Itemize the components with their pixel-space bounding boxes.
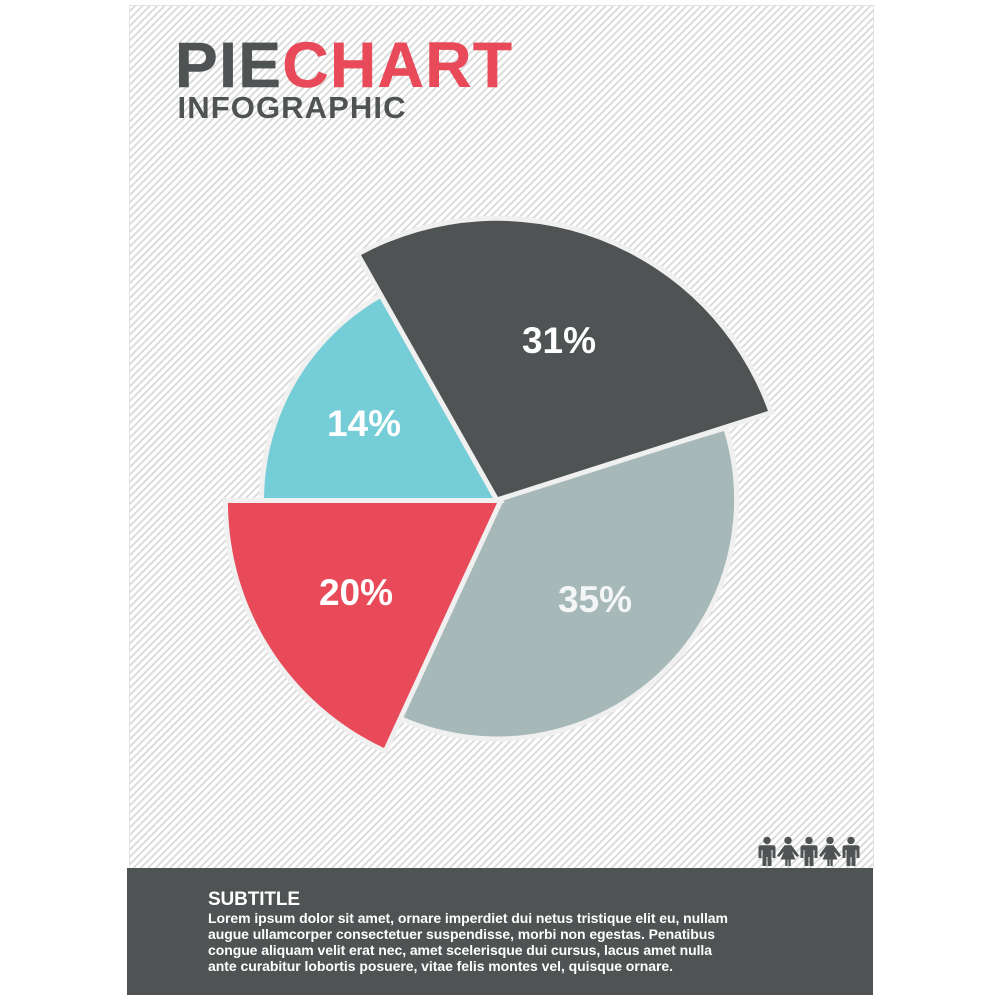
subtitle: SUBTITLE xyxy=(208,889,300,910)
footer text xyxy=(208,889,728,974)
body paragraph: augue ullamcorper consectetuer suspendisse, morbi non egestas. Penatibus xyxy=(208,926,715,942)
icon: row of people xyxy=(758,837,860,866)
pie chart xyxy=(228,221,768,748)
slice: 14% teal xyxy=(264,298,496,498)
body paragraph: ante curabitur lobortis posuere, vitae felis montes vel, quisque ornare. xyxy=(208,958,673,974)
label: 31%: 31% xyxy=(522,320,596,361)
slice: 31% dark xyxy=(361,221,768,497)
body paragraph xyxy=(208,910,728,974)
slice: 20% red xyxy=(228,503,497,748)
label: 14%: 14% xyxy=(327,403,401,444)
title: PIECHART: PIECHART xyxy=(175,29,512,101)
body paragraph: congue aliquam velit erat nec, amet scelerisque dui cursus, lacus amet nulla xyxy=(208,942,712,958)
body paragraph: Lorem ipsum dolor sit amet, ornare imperdiet dui netus tristique elit eu, nullam xyxy=(208,910,728,926)
title: INFOGRAPHIC: INFOGRAPHIC xyxy=(178,90,406,125)
slice: 35% grey-blue xyxy=(403,431,734,736)
label: 35%: 35% xyxy=(558,579,632,620)
footer band xyxy=(127,868,873,995)
title xyxy=(175,29,512,125)
striped background panel xyxy=(130,6,874,868)
label: 20%: 20% xyxy=(319,572,393,613)
